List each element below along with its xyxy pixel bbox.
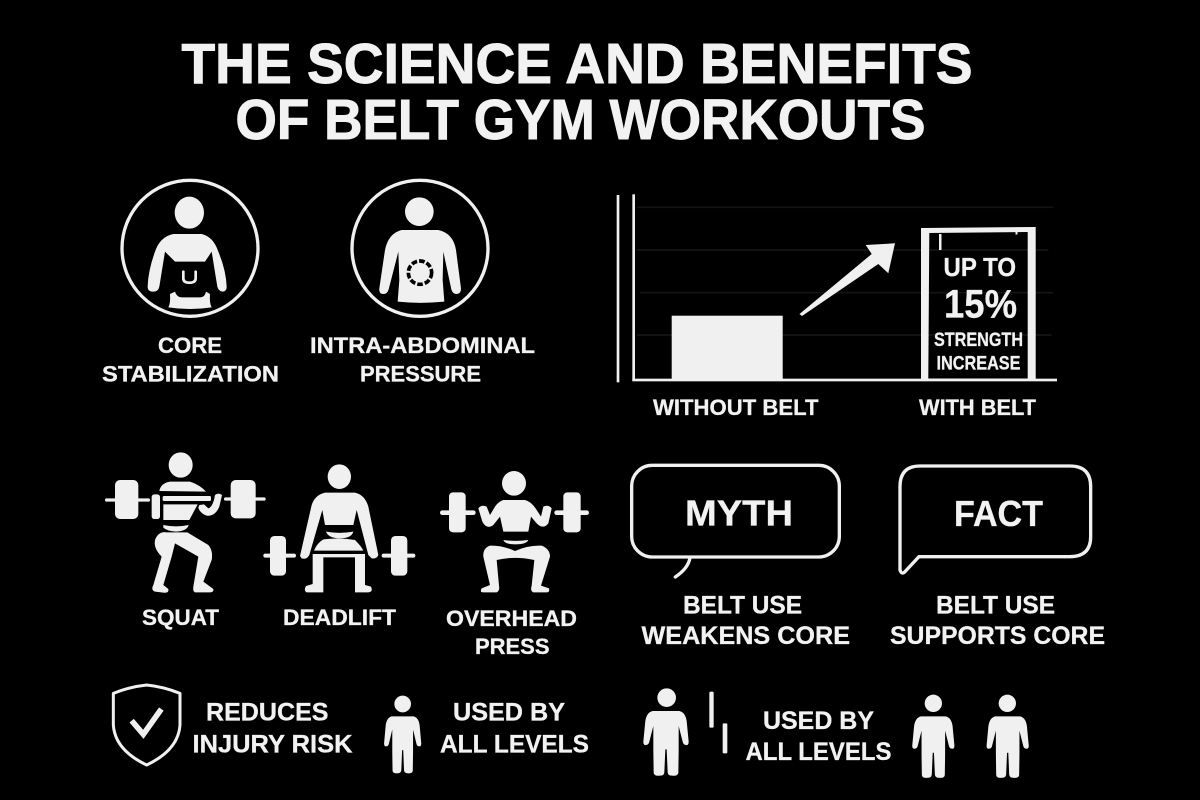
bar: with belt callout: UP TO xyxy=(944,254,1016,282)
text: belt use supports core: BELT USE xyxy=(936,592,1055,620)
panel: fact xyxy=(890,466,1105,650)
icon: person right xyxy=(987,695,1029,778)
icon: core stabilization person xyxy=(122,180,258,316)
text: reduces injury risk: INJURY RISK xyxy=(192,730,352,758)
text: used by all levels: ALL LEVELS xyxy=(440,730,589,758)
label: squat: SQUAT xyxy=(142,605,220,630)
text: used by all levels: USED BY xyxy=(453,698,565,726)
text: belt use weakens core: WEAKENS CORE xyxy=(642,622,850,650)
bar: without belt xyxy=(672,316,783,380)
panel: overhead press xyxy=(440,471,589,659)
panel: squat xyxy=(105,452,266,630)
icon: overhead press figure xyxy=(440,471,589,592)
bar: with belt callout: 15% xyxy=(944,282,1017,326)
text: used by all levels xyxy=(440,698,589,758)
text: used by all levels: ALL LEVELS xyxy=(746,738,892,766)
label: core stabilization: STABILIZATION xyxy=(102,362,279,386)
icon: deadlift figure xyxy=(263,464,415,592)
panel: deadlift xyxy=(263,464,415,630)
title xyxy=(182,32,972,152)
icon: person middle xyxy=(912,695,954,778)
decorative bars xyxy=(709,692,727,753)
bar chart: axes and gridlines xyxy=(617,194,1057,382)
label: with belt: WITH BELT xyxy=(919,395,1036,420)
icon: person xyxy=(384,696,421,773)
panel: intra-abdominal pressure xyxy=(310,180,535,386)
label: intra-abdominal pressure: PRESSURE xyxy=(360,362,481,386)
text: used by all levels: USED BY xyxy=(763,707,874,735)
text: belt use supports core xyxy=(890,592,1105,650)
label: without belt: WITHOUT BELT xyxy=(653,395,819,420)
text: fact: FACT xyxy=(954,493,1043,534)
text: reduces injury risk xyxy=(192,698,352,758)
panel: myth xyxy=(632,465,850,650)
label: overhead press: OVERHEAD xyxy=(446,606,577,631)
bar: with belt callout xyxy=(921,227,1036,379)
title: THE SCIENCE AND BENEFITS xyxy=(182,32,972,96)
text: reduces injury risk: REDUCES xyxy=(206,698,328,726)
label: core stabilization xyxy=(102,333,279,386)
title: OF BELT GYM WORKOUTS xyxy=(236,88,926,152)
text: belt use weakens core: BELT USE xyxy=(683,592,802,620)
label: deadlift: DEADLIFT xyxy=(283,605,397,630)
panel: used by all levels, right xyxy=(643,688,1029,778)
icon: shield with check xyxy=(113,685,180,765)
icon: fact speech bubble xyxy=(900,466,1091,573)
icon: intra-abdominal pressure person xyxy=(352,180,488,316)
icon: myth speech bubble xyxy=(632,465,839,577)
label: intra-abdominal pressure: INTRA-ABDOMINAL xyxy=(310,333,535,358)
icon: squat figure xyxy=(105,452,266,593)
label: core stabilization: CORE xyxy=(158,333,222,358)
icon: person left xyxy=(643,688,689,776)
label: overhead press: PRESS xyxy=(475,634,550,659)
text: used by all levels xyxy=(746,707,892,766)
arrow: strength increase xyxy=(800,243,895,316)
text: belt use weakens core xyxy=(642,592,850,650)
panel: used by all levels, left xyxy=(384,696,589,773)
panel: strength bar chart xyxy=(617,194,1057,420)
bar: with belt callout: INCREASE xyxy=(936,352,1020,374)
panel: core stabilization xyxy=(102,180,279,386)
label: overhead press xyxy=(446,606,577,659)
label: intra-abdominal pressure xyxy=(310,333,535,386)
text: belt use supports core: SUPPORTS CORE xyxy=(890,622,1105,650)
panel: reduces injury risk xyxy=(113,685,353,765)
bar: with belt callout: STRENGTH xyxy=(934,329,1023,351)
text: myth: MYTH xyxy=(685,492,793,534)
